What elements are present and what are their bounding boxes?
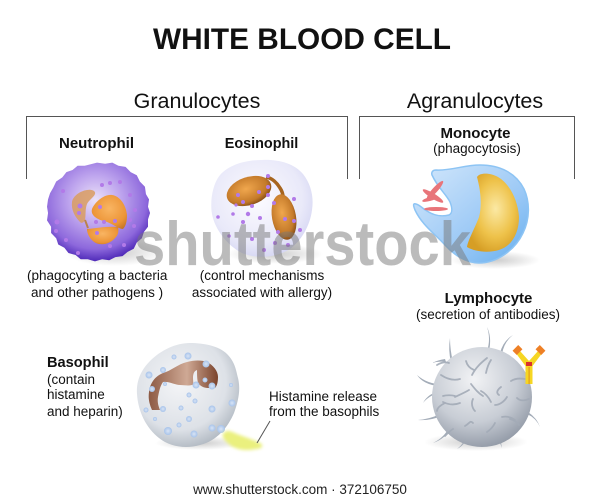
label: Eosinophil: Eosinophil [225, 136, 298, 152]
text: secretion of antibodies: (secretion of antibodies) [416, 307, 560, 322]
icon: histamine release [223, 431, 262, 450]
title: WHITE BLOOD CELL [153, 23, 451, 56]
icon: eosinophil cell [211, 160, 323, 264]
label: Basophil with description: (contain [47, 372, 95, 387]
caption: Eosinophil: (control mechanisms [200, 268, 325, 283]
leader line: histamine [257, 421, 270, 443]
label: Neutrophil: Neutrophil [59, 135, 134, 152]
heading: Agranulocytes: Agranulocytes [407, 89, 543, 113]
label: Basophil with description: histamine [47, 387, 105, 402]
icon: neutrophil cell [47, 163, 165, 266]
caption: Neutrophil: and other pathogens ) [31, 285, 163, 300]
icon: monocyte cell [414, 165, 540, 269]
caption: Eosinophil: associated with allergy) [192, 285, 332, 300]
bracket: Granulocytes [26, 116, 348, 179]
heading: Granulocytes: Granulocytes [134, 89, 260, 113]
bracket: Agranulocytes [360, 116, 574, 179]
caption: Histamine release: Histamine release [269, 389, 377, 404]
caption: Histamine release: from the basophils [269, 404, 380, 419]
label: Basophil with description: Basophil [47, 355, 109, 371]
text: phagocytosis: (phagocytosis) [433, 141, 521, 156]
icon: lymphocyte cell [417, 327, 545, 451]
label: Lymphocyte: Lymphocyte [445, 290, 532, 307]
caption: Neutrophil: (phagocyting a bacteria [27, 268, 168, 283]
icon: antibody [513, 345, 545, 384]
label: Monocyte: Monocyte [440, 125, 511, 142]
footer url: www.shutterstock.com · 372106750 [192, 482, 407, 497]
icon: basophil cell [137, 343, 262, 450]
label: Basophil with description: and heparin) [47, 404, 123, 419]
watermark: shutterstock [134, 210, 471, 279]
